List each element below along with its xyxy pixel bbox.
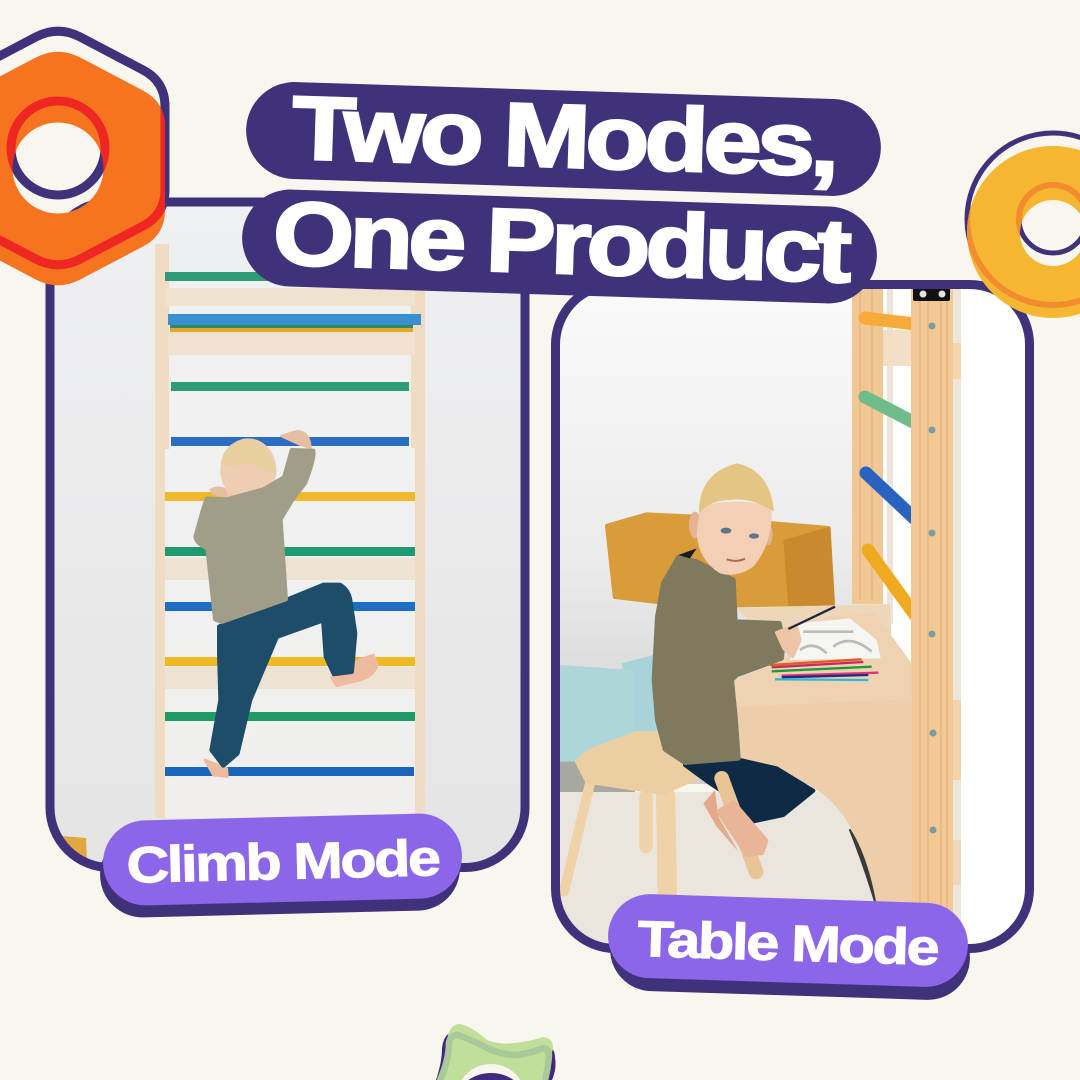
wall bars xyxy=(852,284,961,924)
orange block corner xyxy=(62,836,87,858)
climbing boy xyxy=(195,431,377,777)
title line 1: Two Modes, xyxy=(291,78,836,196)
icon: orange hex nut xyxy=(0,31,165,285)
label: climb mode: Climb Mode xyxy=(126,829,440,894)
icon: green wavy shape xyxy=(436,1024,556,1080)
photo: child drawing at the desk xyxy=(555,284,1030,957)
panel outline xyxy=(556,284,1030,948)
icon: yellow washer xyxy=(967,133,1080,318)
panel outline xyxy=(50,202,525,868)
ladder rails and boards xyxy=(155,244,425,818)
photo: child climbing the wall ladder xyxy=(50,202,525,868)
panel: climb mode xyxy=(50,202,525,868)
panel: table mode xyxy=(555,284,1030,957)
label: table mode: Table Mode xyxy=(637,910,939,976)
label: climb mode xyxy=(99,813,463,918)
label: table mode xyxy=(607,893,971,1001)
ladder rungs xyxy=(165,272,421,776)
title xyxy=(241,77,882,305)
title line 2: One Product xyxy=(272,184,852,302)
scene: cushions, desk, stool and boy xyxy=(560,463,912,903)
